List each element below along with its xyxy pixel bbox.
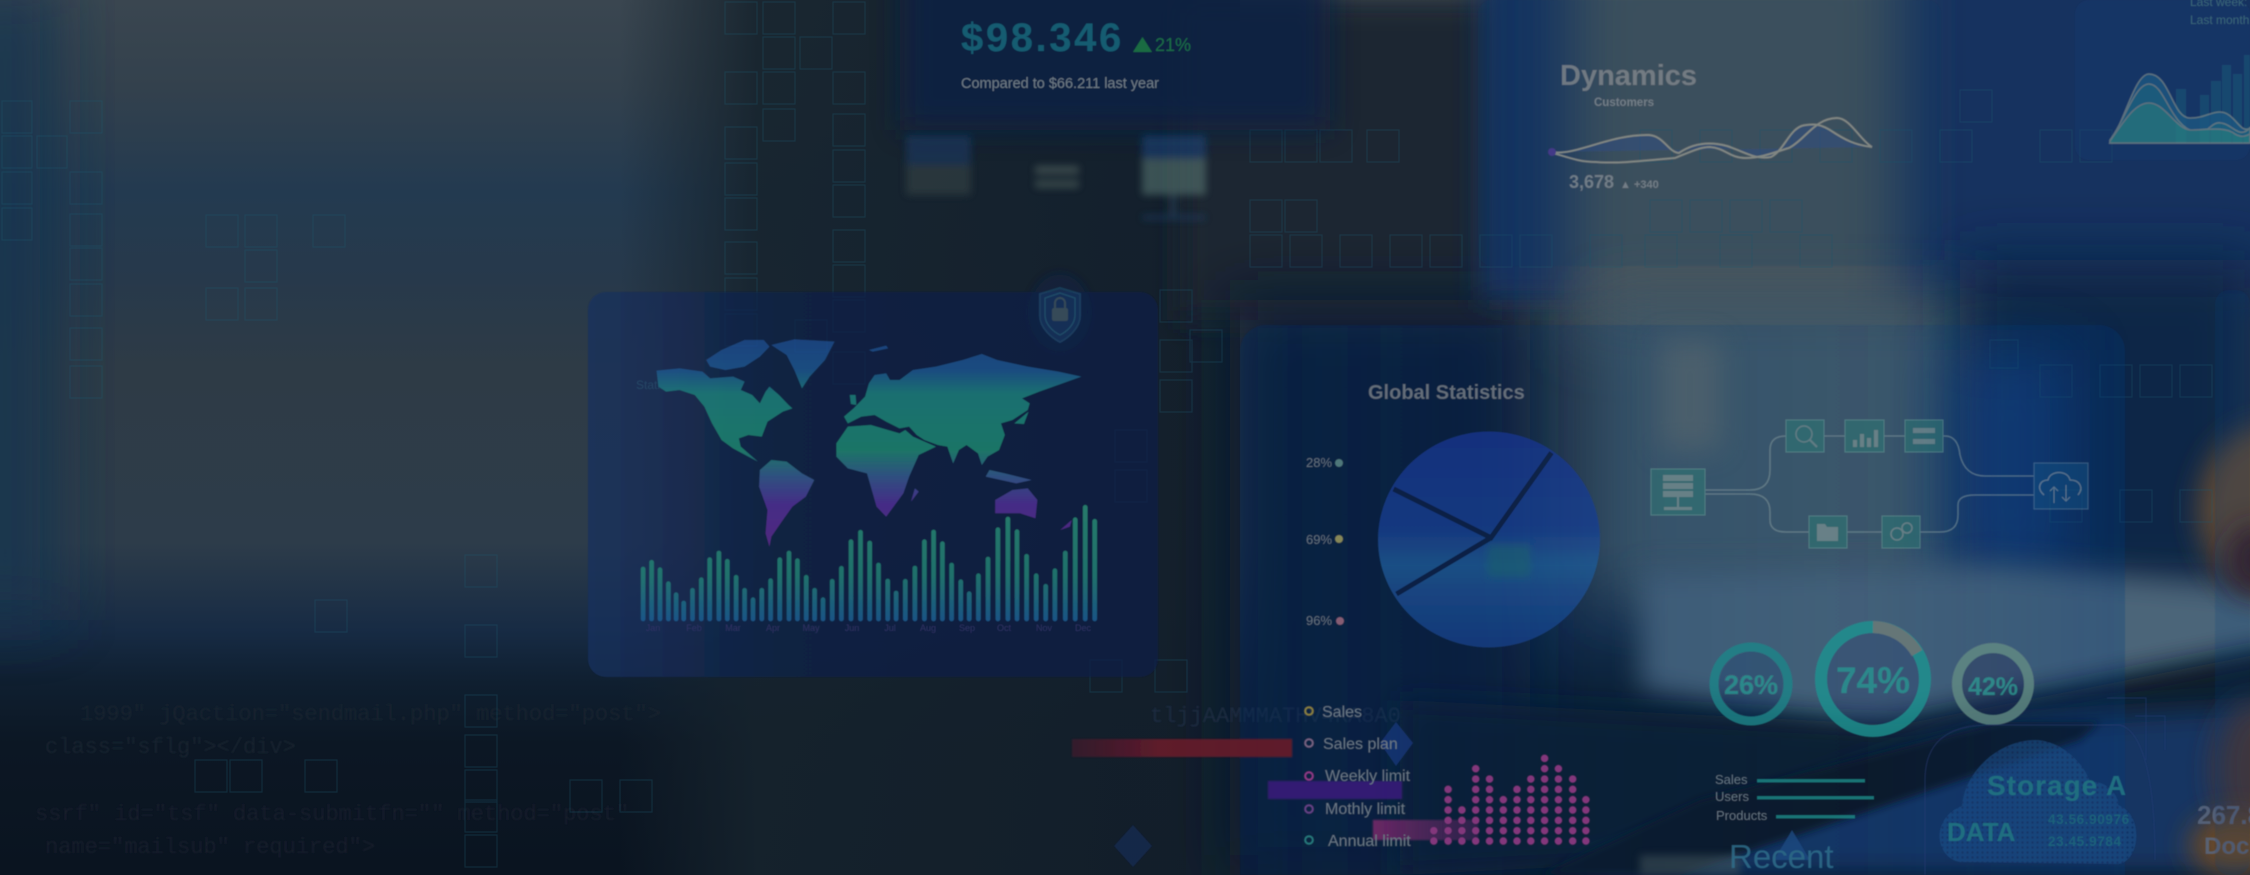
limit legend — [1305, 704, 1411, 850]
icon: gears — [1882, 516, 1920, 548]
customers total: 3,678 — [1569, 172, 1614, 192]
foreground dashboard widgets — [588, 0, 2250, 875]
icon: cloud upload — [2034, 463, 2088, 509]
dynamics heading: Dynamics — [1560, 60, 1697, 92]
icon: server — [1651, 469, 1705, 515]
donut gauge 74%: 74% — [1836, 660, 1910, 701]
limit legend: Mothly limit — [1325, 801, 1406, 818]
revenue change: 21% — [1155, 35, 1191, 55]
month labels: Mar — [725, 623, 741, 633]
blurred server icons under revenue card — [906, 135, 1206, 220]
month labels: Nov — [1036, 623, 1052, 633]
workflow diagram — [1651, 420, 2088, 548]
dynamics subheading: Customers — [1594, 97, 1654, 109]
icon: security shield — [1028, 272, 1092, 352]
icon: exchange — [1905, 420, 1943, 452]
month labels: Oct — [997, 623, 1011, 633]
month labels: May — [802, 623, 820, 633]
faint code text at lower left: name="mailsub" required"> — [45, 835, 375, 860]
revenue value: $98.346 — [961, 16, 1124, 60]
month labels: Dec — [1075, 623, 1091, 633]
recent heading: Recent — [1729, 838, 1834, 875]
sales users products bars: Sales — [1715, 772, 1748, 787]
diamond accents — [1114, 722, 1810, 867]
colored highlight bars — [1072, 739, 1478, 840]
panel: top revenue card — [900, 0, 1330, 130]
storage coordinates: 43.56.90976 — [2048, 812, 2130, 827]
area chart — [2110, 74, 2250, 143]
limit legend: Weekly limit — [1325, 768, 1411, 785]
dynamics line chart — [1553, 118, 1872, 163]
sales users products bars: Products — [1716, 808, 1768, 823]
customers change: ▲ +340 — [1620, 179, 1659, 191]
month labels: Jul — [884, 623, 896, 633]
world map — [657, 339, 1081, 547]
workflow connectors — [1705, 436, 2034, 532]
icon: chart — [1845, 420, 1884, 452]
panel: far right edge card — [2215, 290, 2250, 875]
icon: folder — [1809, 516, 1847, 548]
limit legend: Annual limit — [1328, 833, 1411, 850]
panel: top right chart card — [2075, 0, 2250, 160]
storage coordinates: 23.45.9784 — [2048, 834, 2122, 849]
limit legend: Sales — [1322, 704, 1362, 721]
monthly bar chart — [643, 507, 1095, 619]
donut gauge 42%: 42% — [1968, 673, 2018, 701]
faint map caption: Statistic Areas — [636, 378, 712, 392]
documents figure at right edge — [2197, 800, 2250, 860]
global statistics heading: Global Statistics — [1368, 382, 1525, 404]
panel: dynamics card — [1478, 0, 1941, 266]
donut gauge 26% — [1714, 647, 1788, 721]
donut gauge 42% — [1957, 648, 2029, 720]
month labels: Jun — [845, 623, 859, 633]
comparison note: Compared to $66.211 last year — [961, 76, 1159, 92]
pie legend — [1306, 455, 1344, 628]
month labels: Aug — [920, 623, 936, 633]
pie legend: 96% — [1306, 613, 1332, 628]
storage label: Storage A — [1987, 770, 2127, 801]
pie chart — [1378, 432, 1600, 648]
donut gauge 74% — [1821, 627, 1925, 731]
limit legend: Sales plan — [1323, 736, 1398, 753]
faint code text at lower left — [35, 702, 1401, 860]
month labels: Apr — [766, 623, 780, 633]
icon: search — [1786, 420, 1824, 452]
donut gauge 26%: 26% — [1724, 670, 1778, 700]
pie legend: 69% — [1306, 532, 1332, 547]
data label: DATA — [1947, 817, 2016, 847]
month labels — [646, 623, 1091, 633]
faint code text at lower left: class="sflg"></div> — [45, 735, 296, 760]
faint code text at lower left: tljjAAMMMATHV4RA8A0 — [1150, 704, 1401, 729]
panel: world map and monthly bars — [588, 272, 1158, 677]
dot column chart — [1434, 758, 1586, 841]
month labels: Sep — [959, 623, 975, 633]
panel: global statistics — [1072, 325, 2165, 875]
icon: up triangle — [1133, 37, 1152, 52]
month labels: Feb — [686, 623, 702, 633]
chart start marker — [1548, 148, 1556, 156]
faint code text at lower left: ssrf" id="tsf" data-submitfn="" method="post" — [35, 802, 629, 827]
sales users products bars: Users — [1715, 789, 1749, 804]
month labels: Jan — [646, 623, 660, 633]
storage cloud — [1925, 698, 2165, 875]
faint code text at lower left: 1999" jQaction="sendmail.php" method="post"> — [80, 702, 661, 727]
sales users products bars — [1715, 772, 1874, 823]
bars behind area chart — [2176, 55, 2250, 143]
pie legend: 28% — [1306, 455, 1332, 470]
